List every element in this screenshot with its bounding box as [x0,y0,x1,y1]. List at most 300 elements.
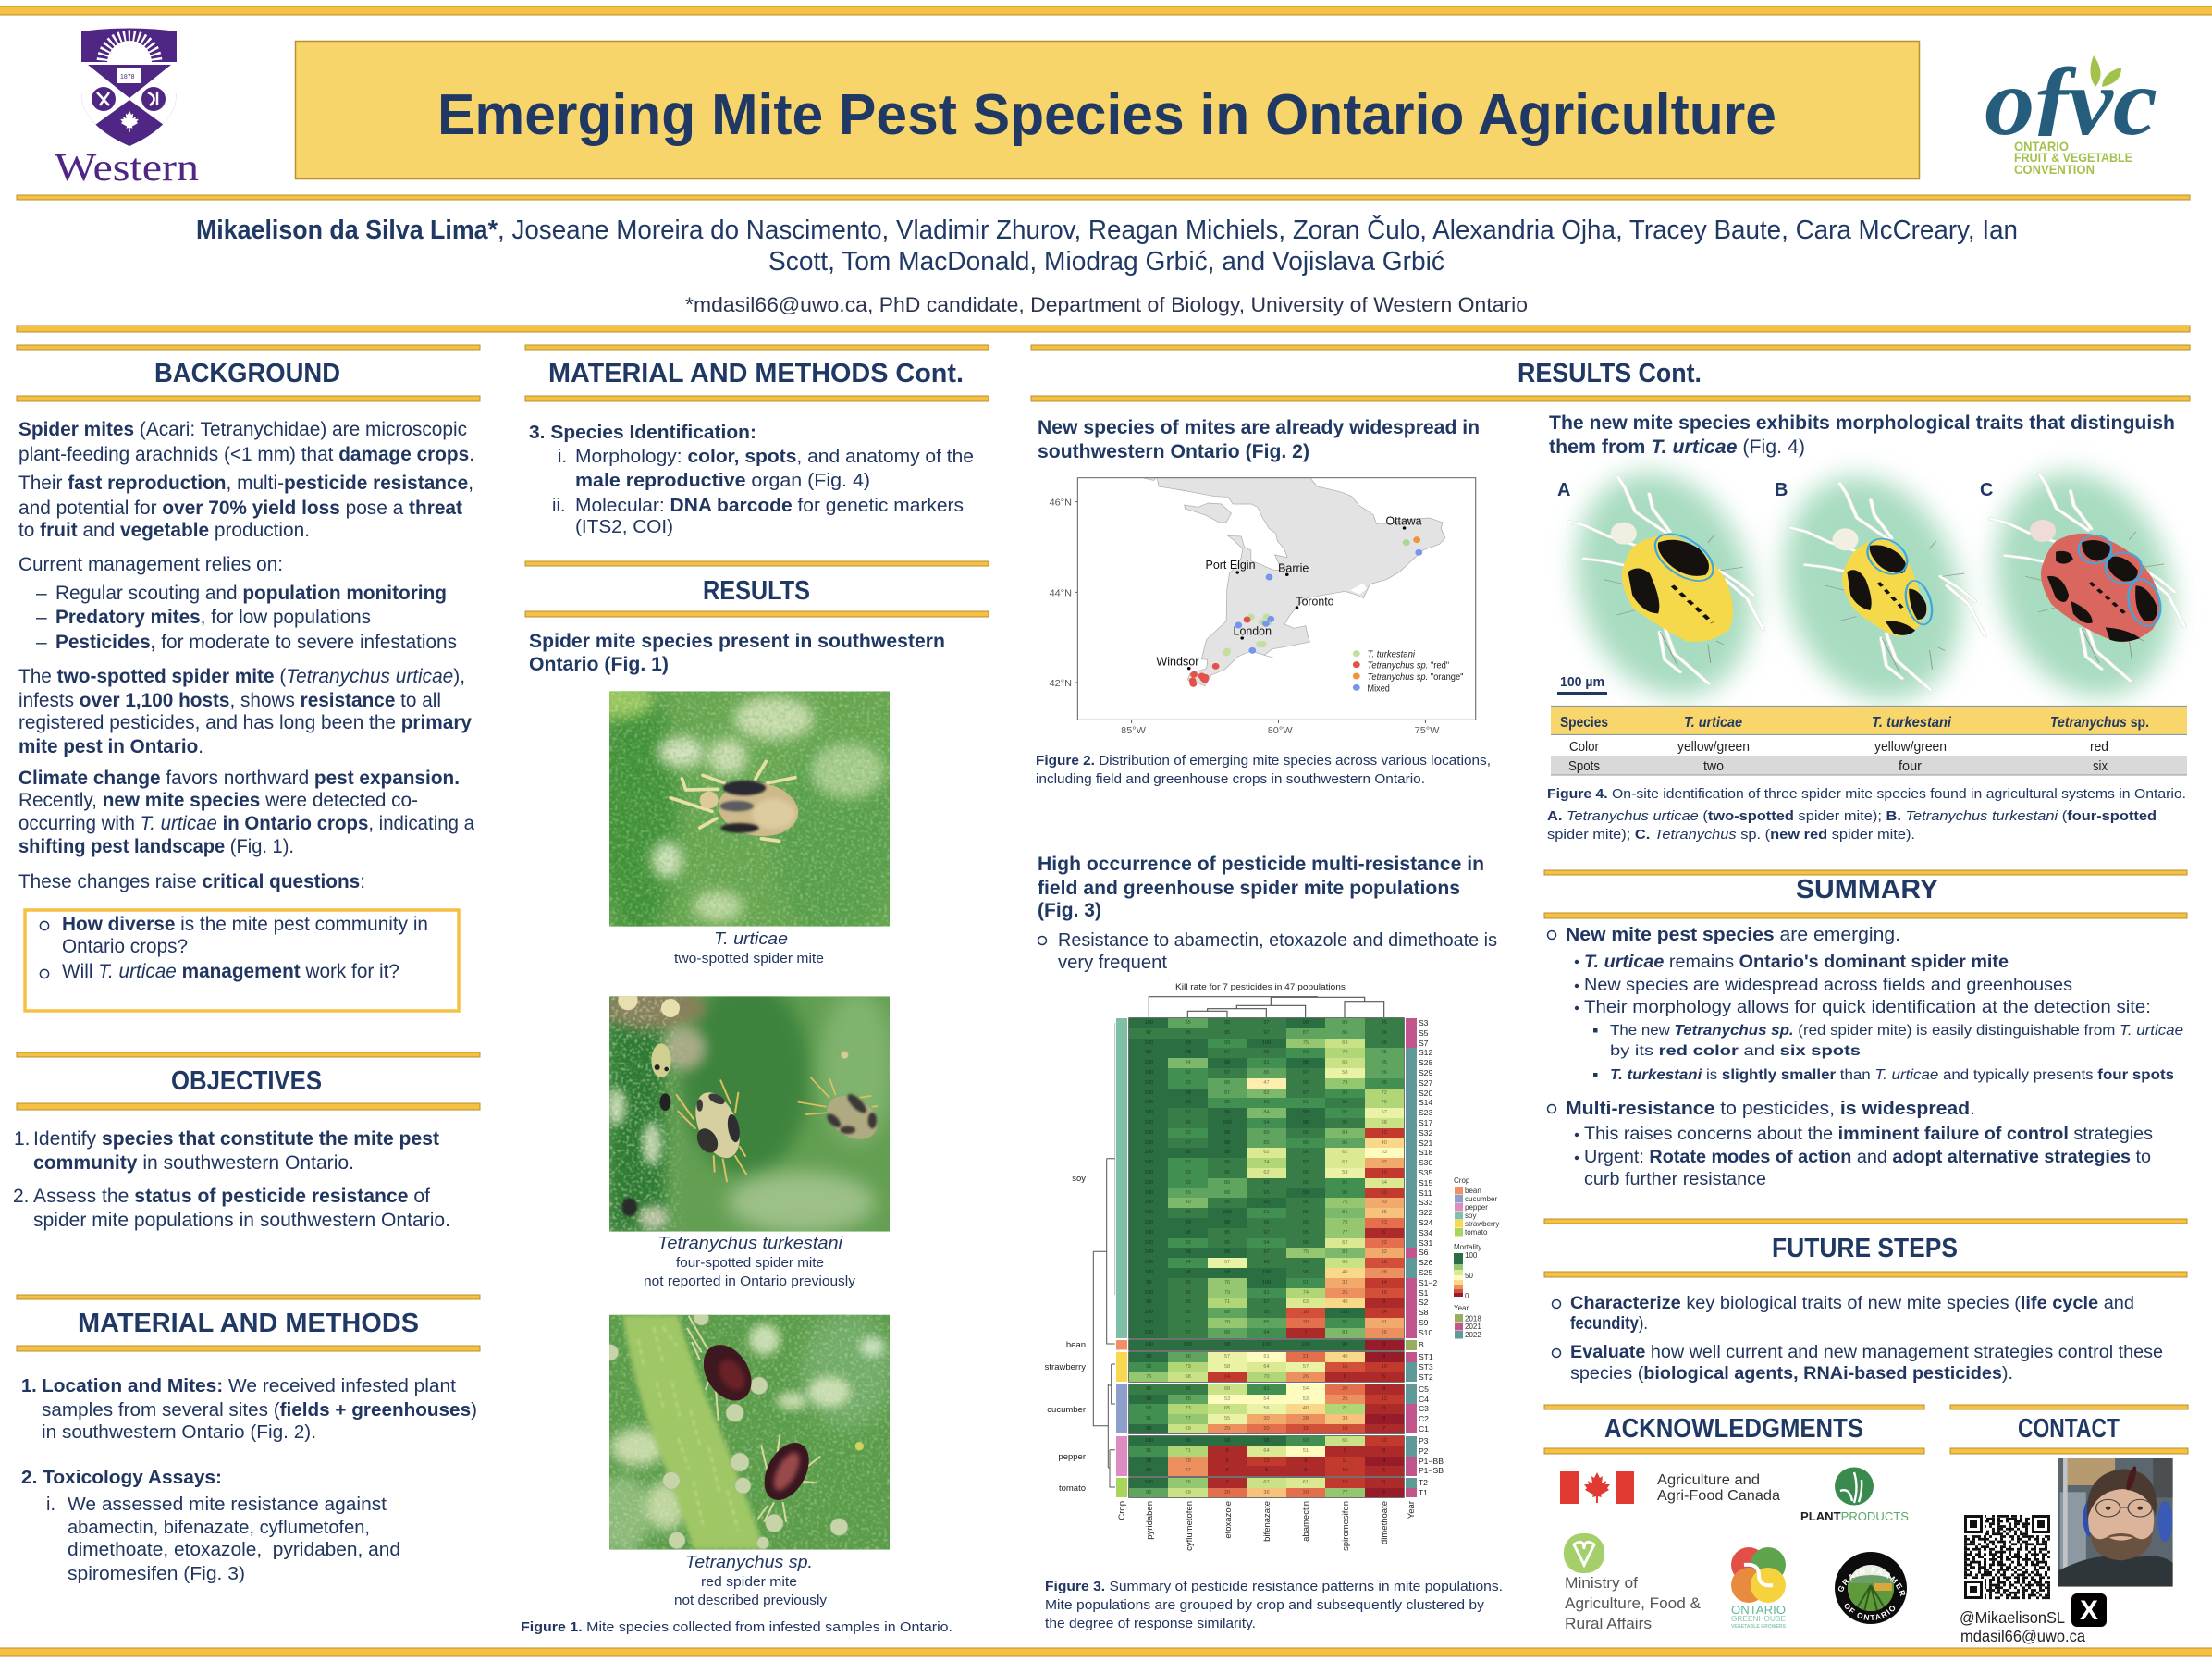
objectives list: Assess the status of pesticide resistance of [33,1186,430,1207]
map: figure 2: Barrie [1278,561,1309,575]
logo: ontario greenhouse: VEGETABLE GROWERS [1731,1624,1787,1630]
heatmap block: soy: 62 [1342,1160,1347,1165]
heatmap block: soy: 79 [1224,1290,1230,1296]
panel letters: C [1980,480,1993,500]
heatmap block: pepper: 8 [1265,1468,1268,1473]
scale bar [1557,674,1607,695]
heatmap block: cucumber: 54 [1303,1386,1309,1392]
heatmap block: pepper: 29 [1186,1458,1191,1463]
species trait table: Spots [1568,758,1600,774]
heatmap block: pepper: 64 [1263,1448,1270,1454]
heatmap block: pepper: 91 [1146,1448,1151,1454]
heatmap block: strawberry: 10 [1382,1364,1387,1370]
subheading: figure 2: southwestern Ontario (Fig. 2) [1038,440,1309,462]
heatmap block: soy: 6 [1382,1230,1385,1236]
heatmap block: soy: S25 [1419,1268,1432,1277]
ofvc logo: ofvc [1985,49,2157,155]
heading: material and methods: MATERIAL AND METHODS [78,1309,419,1338]
subheading: figure 4: The new mite species exhibits morphological traits that distinguish [1549,412,2175,434]
heatmap block: soy: 64 [1382,1180,1387,1186]
heatmap block: soy: 95 [1224,1240,1230,1246]
background text: registered pesticides, and has long been the primary [18,712,472,733]
heatmap block: soy: 12 [1382,1130,1387,1136]
heatmap block: soy: 95 [1303,1080,1309,1086]
heatmap block: soy: S6 [1419,1248,1428,1257]
summary list: The new Tetranychus sp. (red spider mite) is easily distinguishable from T. urticae [1610,1023,2183,1039]
heatmap block: tomato: T1 [1419,1488,1428,1497]
heatmap block: soy: 100 [1223,1120,1232,1126]
heatmap block: cucumber: 71 [1342,1406,1347,1411]
species identification text [529,423,974,537]
heatmap block: soy: 100 [1341,1310,1349,1315]
heatmap block: soy: 75 [1342,1200,1347,1205]
heatmap block: soy: 89 [1342,1020,1347,1026]
heatmap block: soy: 92 [1186,1240,1191,1246]
heatmap block: soy: 96 [1186,1210,1191,1215]
summary list: This raises concerns about the imminent failure of control strategies [1584,1125,2153,1144]
heatmap block: cucumber: C3 [1419,1404,1429,1413]
heatmap block: soy: 23 [1382,1220,1387,1225]
affiliation: *mdasil66@uwo.ca, PhD candidate, Department of Biology, University of Western Ontario [685,293,1528,316]
heatmap block: soy: S18 [1419,1148,1432,1157]
summary list: New mite pest species are emerging. [1566,925,1900,945]
heatmap block: soy: 89 [1224,1180,1230,1186]
heatmap block: soy: 98 [1186,1150,1191,1155]
methods text: samples from several sites ( fields + greenhouses ) [42,1400,477,1421]
photo: T. urticae [609,691,890,927]
heatmap block: strawberry [1129,1352,1448,1382]
heatmap block: strawberry: 5 [1382,1374,1385,1380]
background text: Pesticides, for moderate to severe infestations [55,632,457,653]
heatmap block: pepper: 9 [1344,1448,1346,1454]
heatmap block: soy: 86 [1382,1070,1387,1076]
heatmap block: soy: 98 [1186,1230,1191,1236]
heatmap block: pepper: 11 [1342,1458,1347,1463]
heatmap block: soy: S9 [1419,1318,1428,1327]
methods text: abamectin, bifenazate, cyflumetofen, [68,1518,370,1538]
heatmap block: soy: 89 [1263,1130,1270,1136]
objectives list: spider mite populations in southwestern Ontario. [33,1210,450,1231]
objectives list [13,1128,450,1231]
heatmap block: bean [1129,1340,1448,1350]
heatmap block: soy: 99 [1186,1100,1191,1105]
heatmap block: soy: 78 [1224,1320,1230,1325]
background text: Their fast reproduction, multi-pesticide resistance, [18,473,473,494]
heatmap block: soy: 96 [1303,1200,1309,1205]
heatmap block: strawberry: 58 [1224,1364,1230,1370]
heatmap block: soy: 95 [1263,1190,1270,1196]
heatmap block: soy: 87 [1303,1030,1309,1036]
heatmap block: soy: 85 [1382,1060,1387,1065]
heatmap block: soy: 97 [1263,1249,1270,1255]
heatmap block: pepper: 8 [1304,1458,1307,1463]
heatmap block: cucumber: 20 [1342,1386,1347,1392]
heatmap block: soy: 97 [1146,1030,1151,1036]
heatmap block: pepper: 6 [1382,1468,1385,1473]
heatmap block: cucumber: 93 [1146,1406,1151,1411]
heatmap block: strawberry: ST2 [1419,1372,1433,1382]
western university logo [55,28,199,190]
objectives list: community in southwestern Ontario. [33,1152,354,1174]
heatmap block: soy: 40 [1342,1270,1347,1275]
summary list: Their morphology allows for quick identification at the detection site: [1584,998,2151,1017]
heatmap block: soy: 92 [1186,1130,1191,1136]
heatmap block: soy: 99 [1186,1040,1191,1046]
heatmap block: soy: S24 [1419,1218,1432,1227]
heatmap block: soy: 98 [1186,1050,1191,1055]
heatmap block: soy: 22 [1382,1240,1387,1246]
objectives list: 2. [13,1186,30,1207]
heatmap block: soy: 7 [1304,1330,1307,1335]
heatmap block: soy: S1−2 [1419,1278,1437,1287]
heatmap block: pepper: P3 [1419,1436,1428,1446]
heatmap block: cucumber: 53 [1224,1396,1230,1402]
heatmap block: cucumber: 9 [1382,1386,1385,1392]
heatmap block: soy: S17 [1419,1118,1432,1127]
figure 4 mites [1548,449,2201,723]
future steps list: Evaluate how well current and new management strategies control these [1570,1343,2163,1362]
heatmap block: soy: 93 [1186,1170,1191,1175]
background text: Predatory mites, for low populations [55,607,371,628]
logo: ontario greenhouse [1731,1547,1787,1630]
heatmap block: soy: 98 [1224,1249,1230,1255]
heatmap block: bean: 3 [1382,1342,1385,1347]
background text: plant-feeding arachnids (<1 mm) that damage crops. [18,444,474,465]
heatmap block: soy: 95 [1186,1280,1191,1286]
heatmap block: soy: 76 [1224,1280,1230,1286]
caption: T. urticae: T. urticae [714,929,788,948]
heatmap block: soy: 95 [1382,1020,1387,1026]
heatmap block: soy: 95 [1263,1310,1270,1315]
background text: – [36,607,47,628]
heading: methods cont: MATERIAL AND METHODS Cont. [548,359,964,388]
summary list: Multi-resistance to pesticides, is widespread . [1566,1099,1975,1119]
heatmap block: soy: 85 [1263,1140,1270,1146]
heatmap block: soy: 10 [1382,1170,1387,1175]
background text: The two-spotted spider mite (Tetranychus urticae), [18,666,465,687]
heatmap block: strawberry: 57 [1303,1364,1309,1370]
heatmap legend: Crop [1454,1176,1470,1185]
heatmap block: pepper: 4 [1382,1458,1385,1463]
heatmap block: pepper: 8 [1225,1458,1229,1463]
heatmap legend: soy [1465,1212,1476,1220]
heatmap block: soy: 20 [1303,1320,1309,1325]
heatmap block: strawberry: 51 [1263,1354,1270,1360]
heatmap block: cucumber: 56 [1263,1406,1270,1411]
contact handles [1960,1608,2085,1645]
heatmap block: soy: 100 [1145,1290,1153,1296]
heatmap legend: 2022 [1465,1331,1481,1339]
heatmap block: soy: S30 [1419,1158,1432,1167]
heatmap block: soy: S12 [1419,1048,1432,1057]
background text: – [36,632,47,653]
heatmap block: soy: 100 [1145,1140,1153,1146]
heatmap block: soy: 94 [1263,1330,1270,1335]
heatmap block: soy: 95 [1224,1170,1230,1175]
western university logo: Western [55,147,199,190]
heatmap block: bean: B [1419,1340,1424,1349]
heatmap block: soy: 32 [1342,1280,1347,1286]
heatmap legend [1454,1176,1499,1339]
heatmap block: soy: 100 [1145,1070,1153,1076]
heatmap block: cucumber: 38 [1342,1416,1347,1421]
heatmap block: soy: 100 [1145,1210,1153,1215]
heatmap block: cucumber: 69 [1186,1426,1191,1432]
heatmap block: soy: 13 [1382,1190,1387,1196]
heatmap block: soy: 96 [1303,1130,1309,1136]
figure 2 caption: including field and greenhouse crops in southwestern Ontario. [1036,772,1425,787]
heatmap block: tomato: 100 [1145,1480,1153,1485]
heatmap block: soy: 88 [1224,1310,1230,1315]
crop labels: cucumber [1047,1405,1086,1415]
heatmap block: tomato [1129,1478,1448,1497]
crop labels: tomato [1059,1483,1086,1494]
heatmap block: soy: 96 [1263,1220,1270,1225]
heatmap block: cucumber: 68 [1224,1386,1230,1392]
methods text: dimethoate, etoxazole, pyridaben, and [68,1540,400,1560]
heatmap block: soy: 99 [1186,1220,1191,1225]
heatmap block: soy: 100 [1145,1090,1153,1096]
heatmap block: strawberry: 64 [1263,1364,1270,1370]
map: figure 2: London [1234,624,1272,638]
heatmap axis labels: bifenazate [1262,1501,1272,1542]
heatmap axis labels: abamectin [1301,1501,1311,1542]
heatmap block: soy: 100 [1262,1280,1271,1286]
summary list: New species are widespread across fields and greenhouses [1584,976,2072,995]
heatmap block: cucumber: 73 [1186,1406,1191,1411]
heatmap block: soy: 100 [1145,1240,1153,1246]
heatmap block: pepper: P2 [1419,1446,1428,1456]
heatmap block: soy: 100 [1145,1180,1153,1186]
map: figure 2: Tetranychus sp. "red" [1368,661,1450,671]
heatmap block: soy: S28 [1419,1058,1432,1067]
heatmap block: soy: 91 [1263,1210,1270,1215]
species identification text: (ITS2, COI) [575,517,673,537]
figure 4 caption [1547,787,2186,843]
heatmap block: cucumber: 9 [1382,1406,1385,1411]
logo: ontario ministry: Rural Affairs [1565,1616,1652,1632]
heatmap axis labels [1117,1501,1417,1551]
heatmap block: soy: S10 [1419,1328,1432,1337]
heatmap block: soy: 99 [1303,1190,1309,1196]
summary list: T. urticae remains Ontario's dominant spider mite [1584,953,2009,972]
species trait table: Tetranychus sp. [2050,715,2149,731]
background text: These changes raise critical questions: [18,871,365,892]
methods text: Location and Mites: We received infested plant [42,1376,456,1396]
heatmap axis labels: dimethoate [1380,1501,1390,1544]
heatmap block: soy: 98 [1186,1270,1191,1275]
bullet: resistance frequent [1038,930,1497,973]
heatmap block: pepper: 99 [1186,1438,1191,1444]
methods text: 2. Toxicology Assays: [21,1468,222,1488]
heatmap block: soy: 94 [1186,1260,1191,1265]
map: figure 2: Mixed [1368,684,1390,694]
heatmap block: soy: 100 [1145,1150,1153,1155]
heatmap block: cucumber: 96 [1186,1386,1191,1392]
heatmap block: soy: 74 [1303,1290,1309,1296]
panel: material and methods [17,1295,480,1584]
heatmap block: strawberry: 99 [1146,1354,1151,1360]
caption: T. turkestani: Tetranychus turkestani [657,1234,843,1252]
heading: results continued: RESULTS Cont. [1518,359,1702,388]
heatmap block: pepper [1129,1436,1448,1476]
heatmap block: pepper: 98 [1263,1438,1270,1444]
heatmap block: soy: 83 [1342,1330,1347,1335]
panel: acknowledgments [1544,1404,1925,1629]
heatmap block: soy: 97 [1224,1070,1230,1076]
heatmap block: strawberry: 86 [1186,1354,1191,1360]
heatmap block: soy: 95 [1186,1290,1191,1296]
species trait table: yellow/green [1874,739,1947,755]
heatmap block: soy: 100 [1145,1320,1153,1325]
logo: agriculture canada: Agri-Food Canada [1657,1488,1780,1504]
heatmap block: soy [1129,1018,1448,1337]
heatmap block: strawberry: 14 [1224,1374,1230,1380]
background text [18,419,474,892]
heatmap block: soy: 14 [1382,1310,1387,1315]
crop annotation bars [1116,1018,1127,1497]
heatmap block: cucumber: 28 [1303,1416,1309,1421]
logo: plant products [1800,1467,1909,1523]
panel: contact [1950,1405,2188,1645]
heatmap block: soy: 86 [1263,1070,1270,1076]
subheading: species present: Ontario (Fig. 1) [529,653,669,675]
heatmap block: soy: 32 [1382,1249,1387,1255]
heatmap block: soy: 88 [1224,1080,1230,1086]
heatmap block: soy: 97 [1303,1160,1309,1165]
heatmap block: soy: 93 [1186,1180,1191,1186]
heatmap block: soy: S22 [1419,1208,1432,1217]
heatmap block: soy: 99 [1146,1299,1151,1305]
heatmap block: tomato: 7 [1225,1480,1229,1485]
heading: future steps: FUTURE STEPS [1772,1234,1958,1263]
map: figure 2: 44°N [1050,588,1072,598]
heatmap block: strawberry: 21 [1303,1354,1309,1360]
heatmap block: soy: 92 [1342,1110,1347,1115]
heatmap block: soy: 95 [1303,1230,1309,1236]
map: figure 2: Windsor [1156,655,1199,668]
heatmap block: cucumber: 18 [1342,1426,1347,1432]
heatmap block: soy: 99 [1303,1020,1309,1026]
heatmap legend: 50 [1465,1272,1473,1280]
heatmap block: soy: 100 [1145,1190,1153,1196]
heatmap block: soy: 99 [1263,1200,1270,1205]
objectives list: 1. [14,1128,31,1150]
heatmap block: soy: 18 [1382,1260,1387,1265]
logo: plant products: PLANTPRODUCTS [1800,1509,1909,1523]
species trait table: Color [1569,739,1599,755]
heatmap block: cucumber: 15 [1303,1426,1309,1432]
heatmap block: cucumber: 99 [1146,1396,1151,1402]
species identification text: Morphology: color, spots , and anatomy of the [575,447,974,467]
heatmap block: bean: 98 [1224,1342,1230,1347]
species trait table: Species [1560,715,1608,731]
heatmap block: soy: 9 [1382,1299,1385,1305]
heading: contact: CONTACT [2018,1414,2120,1444]
authors: Mikaelison da Silva Lima* [196,215,498,245]
heatmap block: soy: 100 [1145,1020,1153,1026]
heatmap block: pepper: 12 [1263,1458,1270,1463]
heatmap block: soy: 84 [1342,1130,1347,1136]
heatmap block: soy: 65 [1342,1060,1347,1065]
heatmap block: soy: 98 [1224,1270,1230,1275]
background text: and potential for over 70% yield loss pose a threat [18,498,462,519]
background text: Recently, new mite species were detected co- [18,790,418,811]
heatmap block: soy: 90 [1342,1190,1347,1196]
heatmap block: soy: 95 [1224,1030,1230,1036]
heatmap block: soy: S11 [1419,1188,1432,1198]
heatmap block: soy: 90 [1382,1080,1387,1086]
heatmap block: soy: 96 [1303,1180,1309,1186]
heatmap block: cucumber: 40 [1303,1406,1309,1411]
heatmap block: soy: 40 [1342,1299,1347,1305]
heatmap block: pepper: 98 [1224,1438,1230,1444]
species identification text: Molecular: DNA barcode for genetic markers [575,496,964,516]
logo: ontario greenhouse: GREENHOUSE [1731,1615,1786,1623]
heatmap block: pepper: P1−BB [1419,1456,1444,1465]
heatmap block: soy: 96 [1224,1160,1230,1165]
heatmap legend: Year [1454,1304,1469,1312]
heatmap block: soy: 91 [1263,1290,1270,1296]
heatmap block: soy: 99 [1146,1280,1151,1286]
heatmap block: cucumber: 53 [1303,1396,1309,1402]
heatmap block: soy: 85 [1263,1320,1270,1325]
heatmap block: soy: 96 [1263,1260,1270,1265]
heading: background: BACKGROUND [154,359,340,388]
summary list [1548,925,2183,1189]
heatmap block: bean: 98 [1342,1342,1347,1347]
heatmap block: tomato: 69 [1186,1490,1191,1495]
figure 2 caption [1036,754,1491,787]
heatmap block: cucumber: 91 [1146,1416,1151,1421]
future steps list: Characterize key biological traits of new mite species ( life cycle and [1570,1294,2134,1313]
heatmap block: soy: 96 [1303,1270,1309,1275]
heatmap block: soy: 100 [1262,1040,1271,1046]
heatmap block: soy: 82 [1263,1090,1270,1096]
heatmap block: soy: 95 [1303,1220,1309,1225]
heatmap block: soy: 87 [1224,1090,1230,1096]
heatmap block: soy: S26 [1419,1258,1432,1267]
heatmap block: cucumber [1129,1384,1448,1433]
caption: T. urticae: two-spotted spider mite [674,952,824,966]
summary list: by its red color and six spots [1610,1043,1861,1059]
background text: mite pest in Ontario. [18,736,203,757]
heatmap block: cucumber: 7 [1382,1426,1385,1432]
heatmap block: soy: 100 [1145,1060,1153,1065]
heatmap block: cucumber: 85 [1186,1396,1191,1402]
heading: results: RESULTS [703,576,810,606]
heatmap block: soy: 57 [1382,1110,1387,1115]
map: figure 2: 80°W [1268,725,1293,736]
heatmap block: soy: S3 [1419,1018,1428,1027]
logo: ontario greenhouse: ONTARIO [1731,1603,1786,1617]
caption: Tetranychus sp.: red spider mite [701,1575,797,1590]
heatmap block: soy: 99 [1146,1050,1151,1055]
heatmap block: soy: 97 [1263,1020,1270,1026]
heatmap block: strawberry: 57 [1224,1354,1230,1360]
heatmap axis labels: spiromesifen [1341,1501,1351,1551]
mite C [1990,474,2184,681]
species trait table: yellow/green [1677,739,1750,755]
heatmap block: soy: 28 [1382,1270,1387,1275]
heatmap block: pepper: 98 [1146,1458,1151,1463]
heatmap block: pepper: P1−SB [1419,1466,1444,1475]
heatmap block: soy: S20 [1419,1089,1432,1098]
heatmap block: soy: S27 [1419,1078,1432,1088]
heatmap block: bean: 100 [1184,1342,1192,1347]
heatmap block: strawberry: 6 [1344,1374,1346,1380]
heatmap block: soy: 100 [1145,1160,1153,1165]
